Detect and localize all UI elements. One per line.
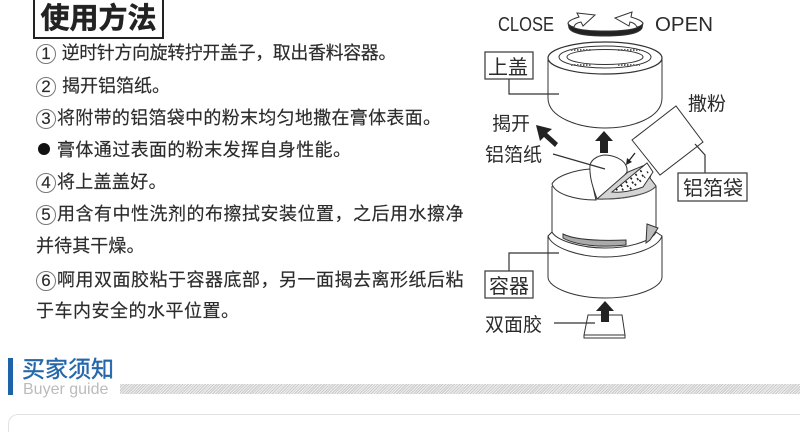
section heading: buyer guide bbox=[8, 356, 800, 398]
step 4: 将上盖盖好。 bbox=[57, 172, 167, 192]
label: foil bbox=[485, 144, 605, 169]
step 2: 揭开铝箔纸。 bbox=[62, 76, 170, 96]
accent bar bbox=[8, 358, 13, 395]
foil bag bbox=[632, 106, 705, 175]
step 1: 1 bbox=[41, 44, 51, 63]
close label: CLOSE bbox=[498, 14, 554, 36]
label: container: 容器 bbox=[489, 275, 529, 298]
label: container bbox=[485, 253, 559, 298]
step 6: 于车内安全的水平位置。 bbox=[36, 301, 240, 321]
arrow: tape up bbox=[596, 301, 614, 322]
label: tape: 双面胶 bbox=[485, 314, 542, 336]
open label: OPEN bbox=[655, 14, 713, 36]
arrow: peel direction bbox=[536, 125, 558, 147]
double-sided tape bbox=[554, 315, 625, 338]
hatched rule bbox=[120, 384, 800, 394]
step 5: 5 bbox=[41, 205, 51, 224]
label: foil: 铝箔纸 bbox=[485, 144, 542, 166]
lid bbox=[548, 42, 662, 128]
step 6 bbox=[36, 270, 464, 321]
note: 膏体通过表面的粉末发挥自身性能。 bbox=[57, 140, 351, 160]
step 6: 啊用双面胶粘于容器底部，另一面揭去离形纸后粘 bbox=[57, 270, 464, 290]
label: lid: 上盖 bbox=[488, 56, 528, 79]
label: lid bbox=[485, 52, 559, 94]
icon: rotation arrows bbox=[568, 12, 643, 36]
heading english: Buyer guide bbox=[23, 381, 108, 398]
step 3: 将附带的铝箔袋中的粉末均匀地撒在膏体表面。 bbox=[57, 108, 441, 128]
step 2: 2 bbox=[41, 77, 51, 96]
step 6: 6 bbox=[41, 271, 51, 290]
powder bbox=[597, 163, 656, 199]
container bbox=[548, 186, 662, 298]
label: sprinkle: 撒粉 bbox=[688, 93, 726, 115]
title: 使用方法 bbox=[40, 3, 156, 35]
step 5: 用含有中性洗剂的布擦拭安装位置，之后用水擦净 bbox=[57, 204, 464, 224]
step 5 bbox=[36, 204, 464, 256]
label: peel: 揭开 bbox=[492, 113, 530, 135]
step 5: 并待其干燥。 bbox=[36, 236, 145, 256]
instruction list bbox=[36, 43, 464, 321]
arrow: small pour bbox=[626, 153, 635, 165]
foil sheet bbox=[552, 155, 627, 200]
rounded content panel bbox=[8, 414, 800, 432]
step 3: 3 bbox=[41, 109, 51, 128]
arrow: lid up bbox=[595, 131, 613, 153]
heading chinese: 买家须知 bbox=[22, 356, 114, 382]
step 4: 4 bbox=[41, 173, 51, 192]
step 1: 逆时针方向旋转拧开盖子，取出香料容器。 bbox=[62, 43, 396, 63]
label: foil bag bbox=[678, 173, 747, 201]
label: foil bag: 铝箔袋 bbox=[683, 177, 743, 200]
